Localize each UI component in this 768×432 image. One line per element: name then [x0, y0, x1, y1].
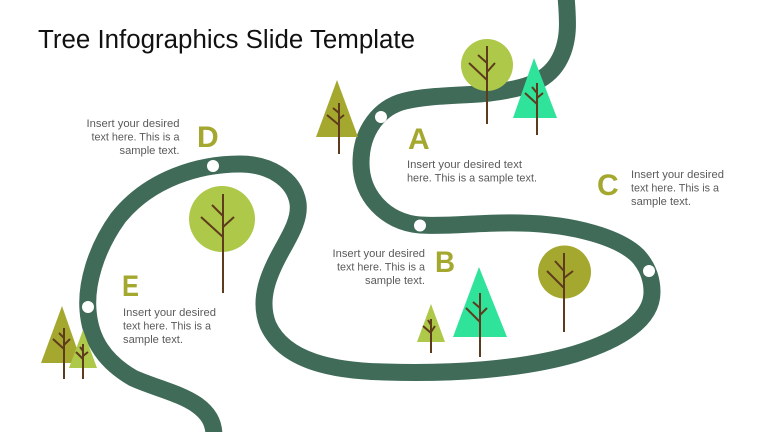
section A: A — [408, 123, 430, 156]
section D: sample text. — [120, 145, 180, 157]
section C: Insert your desired — [631, 169, 724, 181]
tree: round light green top — [461, 39, 513, 124]
section B: B — [435, 246, 455, 279]
section B: text here. This is a — [337, 262, 426, 274]
section D: Insert your desired — [86, 118, 180, 130]
section E: text here. This is a — [123, 320, 212, 332]
waypoint dots — [82, 111, 655, 313]
section D: text here. This is a — [92, 132, 180, 144]
section C — [597, 169, 724, 208]
tree: olive triangle left — [41, 306, 82, 379]
section D — [86, 118, 219, 157]
section C: C — [597, 169, 619, 202]
section E: Insert your desired — [123, 307, 216, 319]
section A — [407, 123, 537, 184]
section B: sample text. — [365, 275, 425, 287]
tree: round olive — [538, 246, 591, 332]
section E: sample text. — [123, 334, 183, 346]
tree: small green triangle left — [69, 330, 97, 379]
title: Tree Infographics Slide Template — [38, 26, 415, 54]
tree: mint triangle top — [513, 58, 557, 135]
section E — [122, 270, 216, 346]
section A: Insert your desired text — [407, 159, 522, 171]
section B — [332, 246, 455, 287]
tree: olive triangle top — [316, 80, 358, 154]
tree: round light green large — [189, 186, 255, 293]
section E: E — [122, 270, 139, 303]
tree: mint triangle bottom — [453, 267, 507, 357]
section C: sample text. — [631, 196, 691, 208]
section A: here. This is a sample text. — [407, 172, 537, 184]
winding road — [88, 0, 652, 432]
tree: small green triangle bottom — [417, 304, 445, 353]
section B: Insert your desired — [332, 248, 425, 260]
section C: text here. This is a — [631, 182, 720, 194]
section D: D — [197, 121, 219, 154]
